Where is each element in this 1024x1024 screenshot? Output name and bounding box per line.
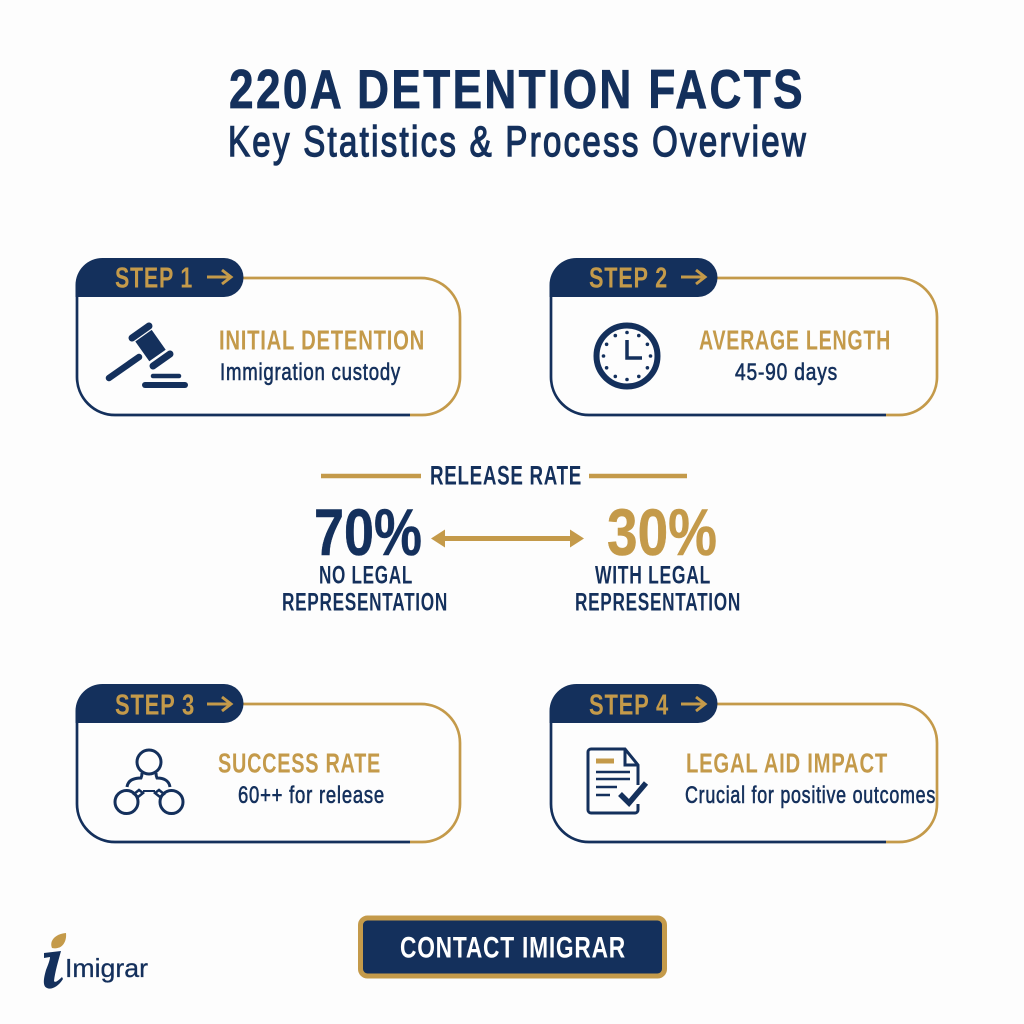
button: contact imigrar: CONTACT IMIGRAR bbox=[400, 932, 626, 964]
panel: step 3 success rate bbox=[76, 684, 460, 842]
panel: step 2 average length bbox=[550, 258, 937, 415]
text: 60++ for release: 60++ for release bbox=[238, 782, 385, 809]
button: contact imigrar bbox=[360, 918, 664, 976]
icon: leaf bbox=[51, 933, 66, 948]
step 2 tab bbox=[550, 258, 718, 297]
step 3 tab bbox=[76, 684, 244, 723]
text: crucial for positive outcomes: Crucial for positive outcomes bbox=[685, 782, 936, 809]
heading: legal aid impact: LEGAL AID IMPACT bbox=[686, 748, 888, 778]
panel: step 4 legal aid impact bbox=[550, 684, 937, 842]
text: immigration custody: Immigration custody bbox=[220, 359, 401, 386]
label: with legal representation bbox=[575, 562, 741, 616]
heading: release rate: RELEASE RATE bbox=[430, 460, 582, 490]
stat: 70%: 70% bbox=[314, 495, 422, 569]
icon: clock bbox=[596, 326, 658, 386]
stat: 30%: 30% bbox=[607, 495, 717, 569]
icon: document with check bbox=[588, 749, 646, 813]
step 4 tab bbox=[550, 684, 718, 723]
label: with legal representation: WITH LEGAL bbox=[595, 562, 711, 590]
step 1 tab bbox=[76, 258, 244, 297]
label: with legal representation: REPRESENTATION bbox=[575, 588, 741, 616]
step 1 tab: STEP 1 bbox=[115, 262, 193, 294]
subtitle: Key Statistics & Process Overview bbox=[228, 118, 808, 166]
text: 45-90 days: 45-90 days bbox=[735, 359, 838, 386]
heading: average length: AVERAGE LENGTH bbox=[699, 324, 891, 356]
title: 220A DETENTION FACTS bbox=[229, 58, 805, 120]
label: no legal representation bbox=[282, 562, 448, 616]
step 4 tab: STEP 4 bbox=[589, 690, 669, 722]
step 3 tab: STEP 3 bbox=[115, 690, 195, 722]
heading: initial detention: INITIAL DETENTION bbox=[219, 324, 425, 356]
icon: stylised i bbox=[44, 951, 63, 989]
release rate comparison bbox=[282, 460, 741, 616]
heading: success rate: SUCCESS RATE bbox=[218, 748, 381, 778]
wordmark: Imigrar bbox=[65, 953, 148, 983]
icon: person in handcuffs bbox=[115, 750, 183, 814]
step 2 tab: STEP 2 bbox=[589, 262, 668, 294]
logo: imigrar bbox=[44, 933, 148, 989]
icon: gavel bbox=[109, 326, 185, 385]
panel: step 1 initial detention bbox=[76, 258, 460, 415]
label: no legal representation: NO LEGAL bbox=[319, 562, 413, 590]
arrow: double headed bbox=[431, 530, 584, 548]
label: no legal representation: REPRESENTATION bbox=[282, 588, 448, 616]
